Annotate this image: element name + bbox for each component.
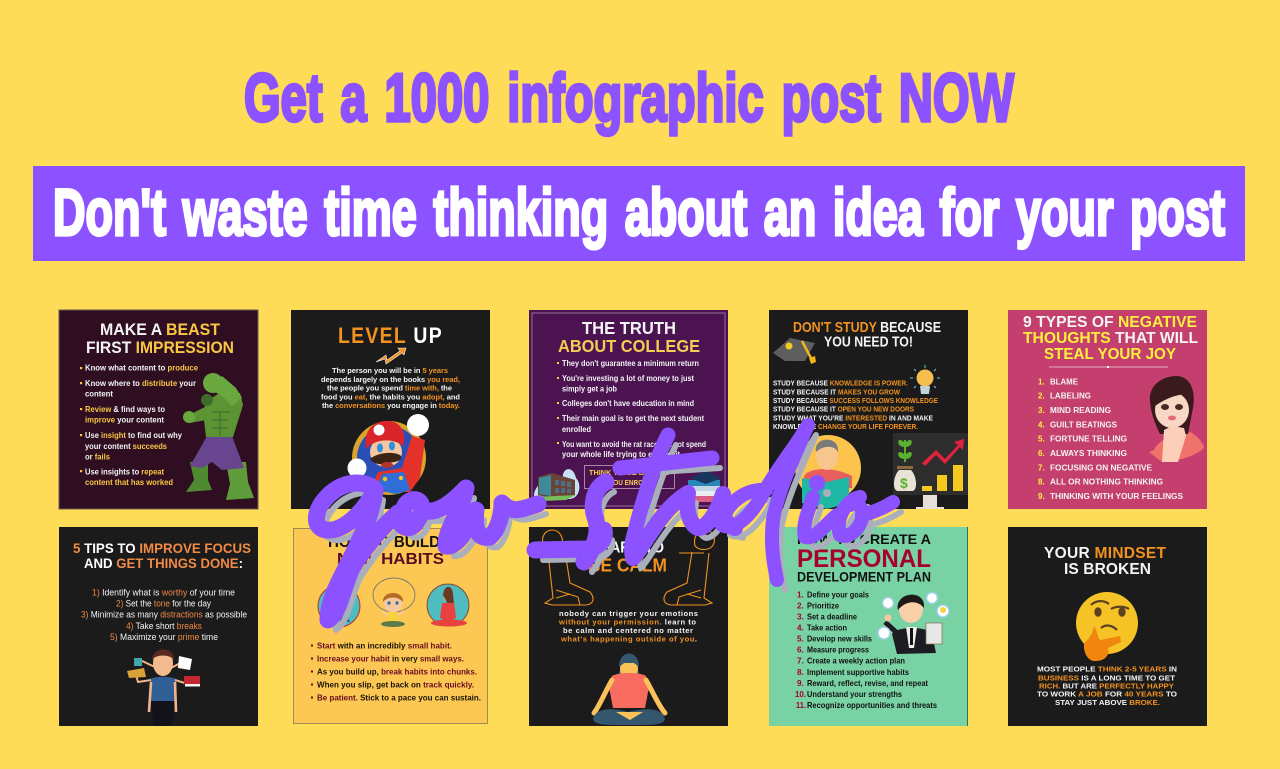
icon: light bulb xyxy=(910,365,940,394)
heading: THOUGHTS THAT WILL xyxy=(1023,330,1198,347)
panel: learn to be calm xyxy=(529,527,728,726)
text block: your content succeeds xyxy=(85,441,167,451)
text block: TO WORK A JOB FOR 40 YEARS TO xyxy=(1037,690,1177,699)
heading: NEW HABITS xyxy=(337,551,444,568)
text block xyxy=(1037,665,1177,707)
icon: meditating woman xyxy=(593,654,665,725)
text block: Colleges don't have education in mind xyxy=(562,398,694,408)
heading xyxy=(1023,314,1198,363)
callout: YOU ENROLL xyxy=(609,478,651,487)
panel: 9 types of negative thoughts xyxy=(1008,310,1207,509)
heading xyxy=(73,540,251,571)
text block: You want to avoid the rat race and not spend xyxy=(562,439,706,449)
panel: don't study because you need to xyxy=(769,310,968,509)
heading: STEAL YOUR JOY xyxy=(1044,346,1176,363)
text block: 7. xyxy=(797,657,804,666)
heading: BE CALM xyxy=(588,556,667,576)
text block: Use insights to repeat xyxy=(85,466,164,476)
text block: They don't guarantee a minimum return xyxy=(562,358,699,368)
text block: STUDY BECAUSE IT OPEN YOU NEW DOORS xyxy=(773,405,914,414)
text block: The person you will be in 5 years xyxy=(332,366,448,375)
icon: graduation cap xyxy=(773,338,816,364)
panel: the truth about college xyxy=(529,310,728,509)
signature stroke xyxy=(316,425,893,620)
text block: or fails xyxy=(85,452,110,462)
chart: money growth: $ xyxy=(900,475,908,491)
heading: DEVELOPMENT PLAN xyxy=(797,569,931,585)
text block: 6. xyxy=(1038,449,1045,458)
text block: BLAME xyxy=(1050,377,1079,386)
text block: 2) Set the tone for the day xyxy=(116,598,211,608)
icon: multitasking person xyxy=(127,650,200,726)
icon: hiker circle xyxy=(318,585,360,627)
text block: 3. xyxy=(1038,406,1045,415)
text block: improve your content xyxy=(85,414,164,424)
text block: Take action xyxy=(807,624,847,632)
text block: without your permission. learn to xyxy=(558,617,696,626)
text block: content xyxy=(85,388,113,398)
panel: 5 tips to improve focus xyxy=(59,527,258,726)
text block: STUDY BECAUSE SUCCESS FOLLOWS KNOWLEDGE xyxy=(773,396,938,405)
icon: rising arrow xyxy=(376,348,406,364)
text block: You're investing a lot of money to just xyxy=(562,373,694,383)
text block: 4. xyxy=(797,624,804,632)
text block: content that has worked xyxy=(85,477,173,487)
text block: 10. xyxy=(795,690,806,699)
icon: worried girl xyxy=(1149,376,1204,462)
text block: Define your goals xyxy=(807,590,869,599)
text block xyxy=(317,640,481,702)
chart: money growth xyxy=(893,433,968,509)
text block: 2. xyxy=(797,601,804,610)
watermark: gow studio signature xyxy=(316,425,901,630)
text block: Implement supportive habits xyxy=(807,668,909,677)
text block: Develop new skills xyxy=(807,635,872,644)
text block: STUDY WHAT YOU'RE INTERESTED IN AND MAKE xyxy=(773,413,933,422)
text block: 8. xyxy=(1038,478,1045,487)
text block: be calm and centered no matter xyxy=(563,626,693,635)
text block: nobody can trigger your emotions xyxy=(559,609,698,618)
heading: YOU NEED TO! xyxy=(824,334,913,351)
text block: Start with an incredibly small habit. xyxy=(317,640,452,650)
text block: 4) Take short breaks xyxy=(126,621,202,631)
callout: THINK TWICE BEFORE xyxy=(589,468,669,477)
text block: Increase your habit in very small ways. xyxy=(317,653,464,663)
heading: HOW TO BUILD xyxy=(328,534,440,551)
icon: seated outlines xyxy=(543,530,714,605)
heading xyxy=(1044,545,1167,578)
text block: Use insight to find out why xyxy=(85,430,182,440)
panel: personal development plan xyxy=(769,527,968,726)
text block: the people you spend time with, the xyxy=(327,384,452,393)
text block xyxy=(795,590,937,710)
text block: depends largely on the books you read, xyxy=(321,375,460,384)
text block: Prioritize xyxy=(807,601,839,610)
heading: FIRST IMPRESSION xyxy=(86,339,234,357)
heading xyxy=(558,318,700,356)
text block: 3. xyxy=(797,612,804,621)
text block: Their main goal is to get the next student xyxy=(562,413,704,423)
heading: ABOUT COLLEGE xyxy=(558,336,700,356)
text block xyxy=(85,362,198,487)
text block: Be patient. Stick to a pace you can sustain. xyxy=(317,692,481,702)
heading: YOUR MINDSET xyxy=(1044,545,1167,562)
text block: 9. xyxy=(797,679,804,688)
text block: LABELING xyxy=(1050,392,1091,401)
text block: STAY JUST ABOVE BROKE. xyxy=(1055,698,1160,707)
heading: 9 TYPES OF NEGATIVE xyxy=(1023,314,1197,331)
text block: FOCUSING ON NEGATIVE xyxy=(1050,463,1153,472)
text block: 1. xyxy=(797,590,804,599)
signature shadow xyxy=(324,435,901,630)
text block: food you eat, the habits you adopt, and xyxy=(321,392,460,401)
text block: 2. xyxy=(1038,392,1045,401)
signature dot xyxy=(809,475,825,491)
heading: DON'T STUDY BECAUSE xyxy=(793,319,941,336)
text block: FORTUNE TELLING xyxy=(1050,435,1127,444)
icon: books with graduation cap xyxy=(688,471,722,502)
text block xyxy=(773,379,938,431)
text block: STUDY BECAUSE IT MAKES YOU GROW xyxy=(773,387,900,396)
text block: 9. xyxy=(1038,492,1045,501)
text block: the conversations you engage in today. xyxy=(322,401,460,410)
text block: Measure progress xyxy=(807,646,869,655)
signature dot shadow xyxy=(823,489,831,497)
text block: 5) Maximize your prime time xyxy=(110,632,218,642)
heading: 5 TIPS TO IMPROVE FOCUS xyxy=(73,540,251,556)
text block: 1) Identify what is worthy of your time xyxy=(92,587,235,597)
text block: 8. xyxy=(797,668,804,677)
panel: level up xyxy=(291,310,490,509)
text block: ALL OR NOTHING THINKING xyxy=(1050,478,1163,487)
text block: Create a weekly action plan xyxy=(807,657,905,666)
heading xyxy=(86,321,234,357)
icon: thinking emoji xyxy=(1076,592,1138,661)
text block: ALWAYS THINKING xyxy=(1050,449,1127,458)
heading: THE TRUTH xyxy=(582,318,676,338)
text block: As you build up, break habits into chunks. xyxy=(317,666,477,676)
text block: Set a deadline xyxy=(807,612,857,621)
text block: Understand your strengths xyxy=(807,690,902,699)
text block: what's happening outside of you. xyxy=(560,635,697,644)
text block xyxy=(562,358,706,459)
text block xyxy=(1038,377,1184,501)
text block: RICH. BUT ARE PERFECTLY HAPPY xyxy=(1039,682,1174,691)
text block: 11. xyxy=(796,701,806,710)
text block: Review & find ways to xyxy=(85,404,165,414)
text block: 5. xyxy=(1038,435,1045,444)
icon: hulk xyxy=(183,373,254,500)
heading: HOW TO CREATE A xyxy=(797,531,931,547)
heading: IS BROKEN xyxy=(1064,561,1151,578)
heading: MAKE A BEAST xyxy=(100,321,220,339)
heading: AND GET THINGS DONE: xyxy=(84,555,243,571)
text block: BUSINESS IS A LONG TIME TO GET xyxy=(1038,673,1175,682)
text block: simply get a job xyxy=(562,384,617,394)
heading xyxy=(793,319,941,351)
heading: LEVEL UP xyxy=(338,323,443,348)
text block: 7. xyxy=(1038,463,1045,472)
panel: make a beast first impression xyxy=(59,310,258,509)
icon: college building xyxy=(534,469,579,501)
text block: Know what content to produce xyxy=(85,362,198,372)
text block: MIND READING xyxy=(1050,406,1111,415)
heading xyxy=(797,531,931,585)
text block xyxy=(321,366,460,410)
text block: Reward, reflect, revise, and repeat xyxy=(807,679,928,688)
text block: Recognize opportunities and threats xyxy=(807,701,937,710)
text block: enrolled xyxy=(562,424,591,434)
text block: STUDY BECAUSE KNOWLEDGE IS POWER. xyxy=(773,379,908,388)
heading xyxy=(328,534,444,568)
panel: your mindset is broken xyxy=(1008,527,1207,726)
text block xyxy=(558,609,698,644)
icon: mario xyxy=(348,414,429,495)
text block: GUILT BEATINGS xyxy=(1050,420,1118,429)
text block: MOST PEOPLE THINK 2-5 YEARS IN xyxy=(1037,665,1177,674)
text block: 6. xyxy=(797,646,804,655)
text block: When you slip, get back on track quickly. xyxy=(317,679,474,689)
icon: meditating woman circle xyxy=(427,584,469,626)
text block: KNOWLEDGE CHANGE YOUR LIFE FOREVER. xyxy=(773,422,918,431)
icon: person reading xyxy=(795,435,861,509)
text block: 4. xyxy=(1038,420,1045,429)
heading: PERSONAL xyxy=(797,545,931,573)
icon: boy jumping rope xyxy=(373,578,415,627)
text block xyxy=(81,587,247,642)
callout xyxy=(584,466,674,488)
icon: businessman xyxy=(878,592,949,654)
text block: Know where to distribute your xyxy=(85,378,197,388)
heading: LEARN TO xyxy=(592,540,664,557)
panel: how to build new habits xyxy=(293,528,488,724)
text block: your whole life trying to escape it xyxy=(562,449,680,459)
text block: THINKING WITH YOUR FEELINGS xyxy=(1050,492,1184,501)
text block: 3) Minimize as many distractions as possible xyxy=(81,610,247,620)
text block: 1. xyxy=(1038,377,1045,386)
text block: 5. xyxy=(797,635,804,644)
